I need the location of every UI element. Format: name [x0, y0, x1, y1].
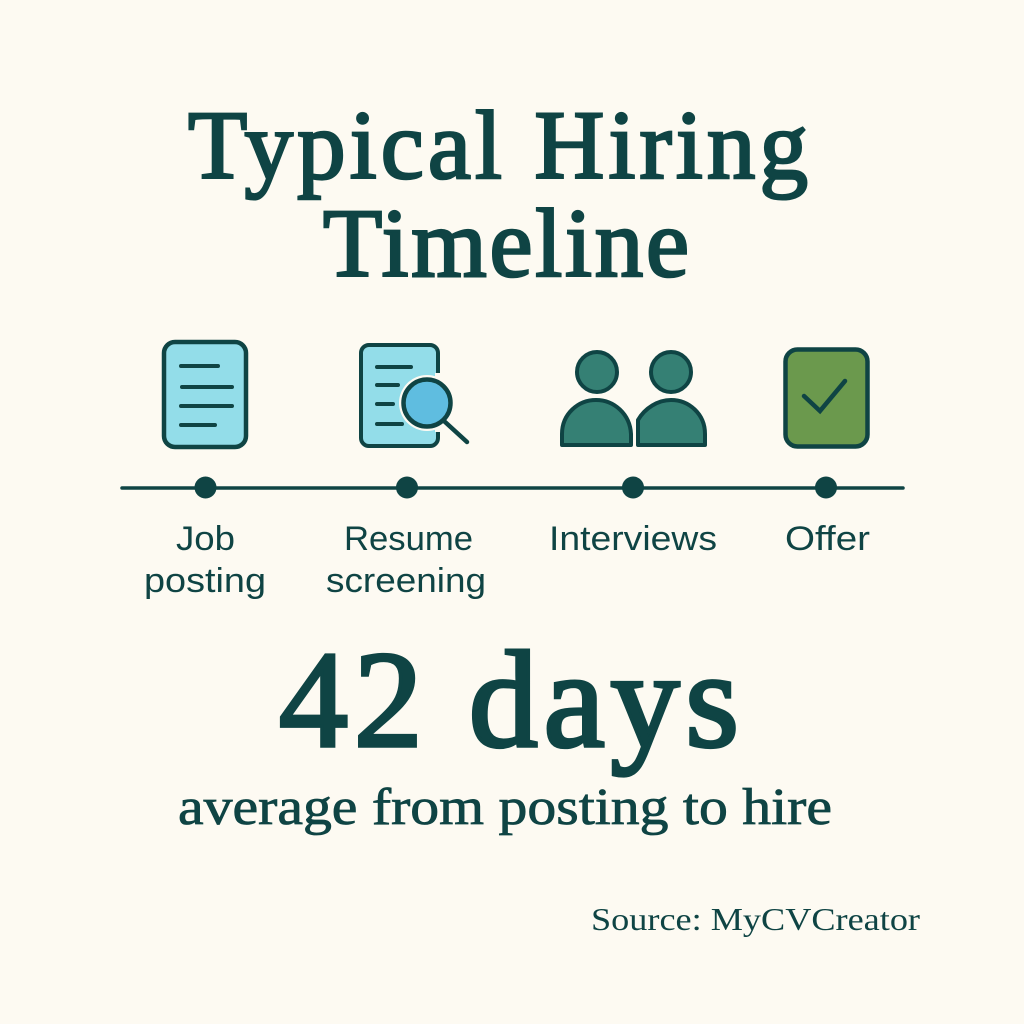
label: job posting: Job — [176, 520, 235, 558]
title: Timeline — [323, 190, 689, 297]
label: interviews: Interviews — [549, 520, 717, 558]
label: resume screening: screening — [326, 562, 486, 600]
icon: offer checkmark — [786, 350, 868, 446]
source: Source: MyCVCreator — [591, 901, 920, 937]
label: job posting: posting — [144, 562, 266, 600]
label: job posting — [144, 520, 266, 600]
label: offer: Offer — [785, 520, 870, 558]
label: resume screening — [326, 520, 486, 600]
title: Typical Hiring — [188, 92, 808, 199]
icon: job posting document — [164, 342, 246, 447]
title — [188, 92, 808, 297]
statistic caption: average from posting to hire — [178, 779, 832, 836]
big statistic: 42 days — [279, 623, 739, 776]
timeline axis — [122, 476, 903, 498]
label: resume screening: Resume — [344, 520, 473, 558]
icon: resume screening magnifier — [361, 345, 467, 446]
icon: interviews people — [562, 352, 705, 445]
